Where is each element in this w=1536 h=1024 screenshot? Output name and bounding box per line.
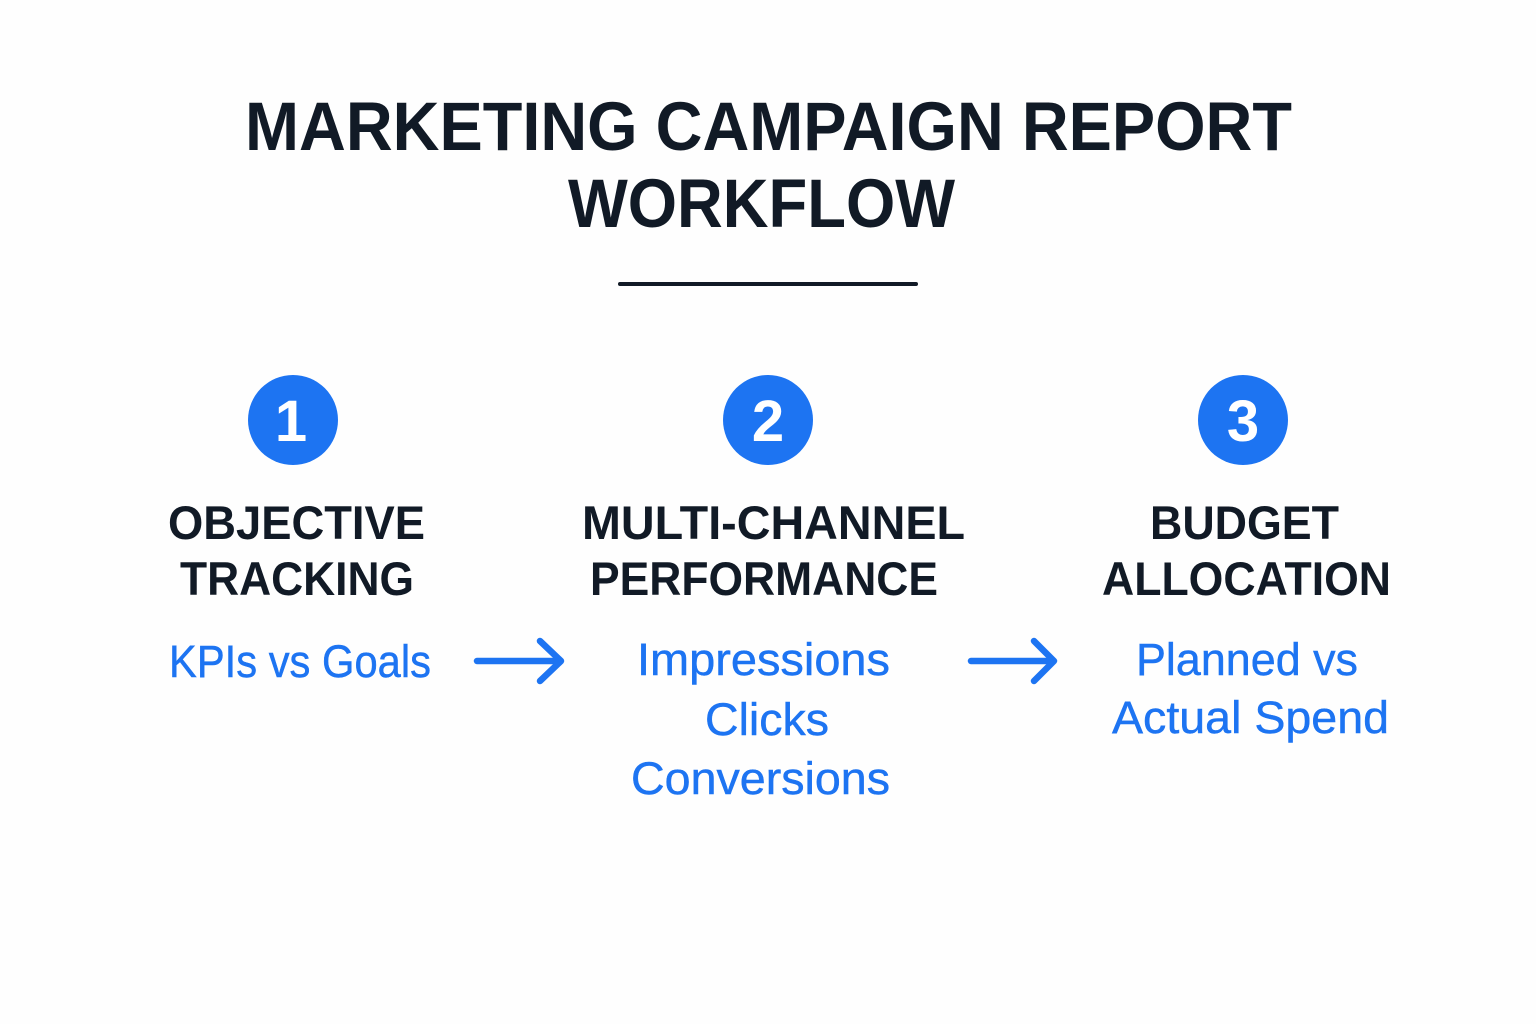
arrow: step 2 to step 3 (971, 641, 1054, 681)
icon: number 2 badge (723, 375, 813, 465)
heading: budget allocation (1102, 497, 1391, 606)
text: planned vs actual spend: Planned vs (1136, 634, 1358, 685)
text: impressions, clicks, conversions: Impressions (637, 634, 890, 685)
icon: number 1 badge: 1 (275, 389, 307, 454)
title: MARKETING CAMPAIGN REPORT (245, 88, 1292, 165)
arrow: step 1 to step 2 (477, 641, 561, 681)
heading: objective tracking (168, 497, 425, 606)
icon: number 2 badge: 2 (752, 389, 784, 454)
icon: number 3 badge: 3 (1227, 389, 1259, 454)
icon: number 3 badge (1198, 375, 1288, 465)
text: impressions, clicks, conversions (631, 634, 890, 804)
heading: objective tracking: TRACKING (180, 553, 414, 606)
step 2: multi-channel performance (582, 375, 965, 804)
text: impressions, clicks, conversions: Clicks (705, 694, 829, 745)
heading: budget allocation: BUDGET (1150, 497, 1339, 550)
heading: multi-channel performance: MULTI-CHANNEL (582, 497, 965, 550)
title underline (618, 282, 918, 286)
title (245, 88, 1292, 242)
text: planned vs actual spend: Actual Spend (1112, 692, 1389, 743)
text: KPIs vs Goals: KPIs vs Goals (169, 636, 431, 687)
step 1: objective tracking (168, 375, 431, 687)
text: planned vs actual spend (1112, 634, 1389, 743)
title: WORKFLOW (568, 165, 956, 242)
step 3: budget allocation (1102, 375, 1391, 743)
icon: number 1 badge (248, 375, 338, 465)
heading: objective tracking: OBJECTIVE (168, 497, 425, 550)
heading: multi-channel performance: PERFORMANCE (590, 553, 938, 606)
heading: budget allocation: ALLOCATION (1102, 553, 1391, 606)
text: impressions, clicks, conversions: Conversions (631, 753, 890, 804)
heading: multi-channel performance (582, 497, 965, 606)
